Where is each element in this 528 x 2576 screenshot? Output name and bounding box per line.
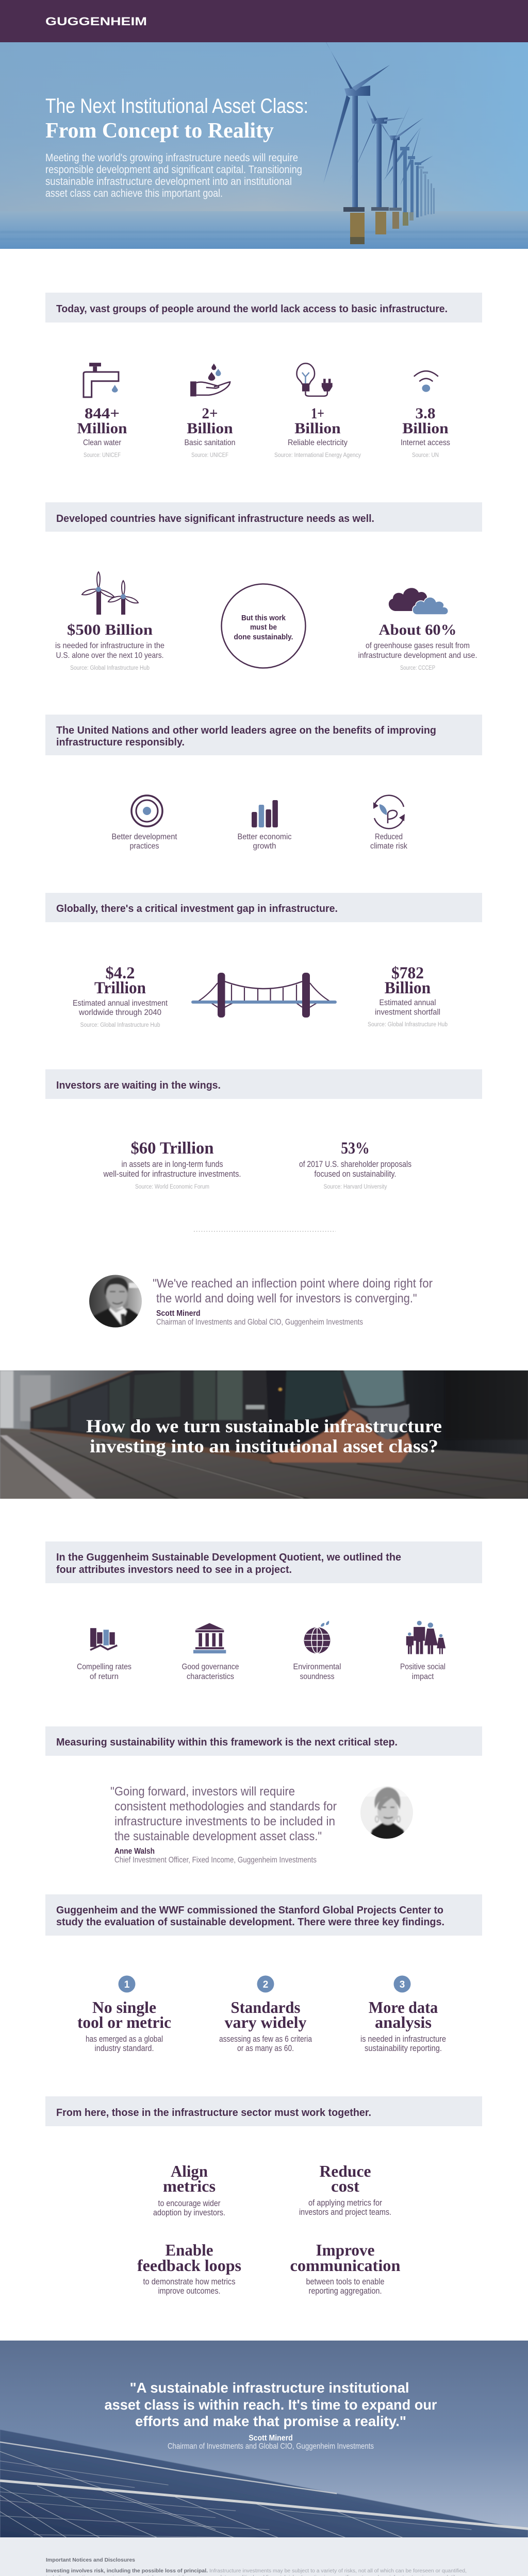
far turbines (419, 166, 435, 216)
stat: $4.2 trillion: Trillion (94, 979, 146, 997)
stat: basic sanitation: Basic sanitation (185, 438, 235, 447)
icon: returns chart (90, 1628, 117, 1650)
action: align metrics: Align (171, 2162, 208, 2180)
banner: work together: From here, those in the infrastructure sector must work together. (56, 2107, 371, 2119)
stat: basic sanitation: Billion (187, 420, 233, 437)
label: compelling rates of return (77, 1663, 131, 1681)
photo panel: tram with heading (0, 1370, 528, 1502)
finding 2 (219, 1975, 312, 2053)
portrait: Anne Walsh (360, 1786, 413, 1839)
finding 1: has emerged as a global (86, 2034, 163, 2044)
stat: reliable electricity: 1+ (311, 405, 324, 422)
label: better development practices (111, 833, 177, 851)
stat: internet access: Internet access (401, 438, 450, 447)
stat: $500 billion: is needed for infrastructure in the (55, 641, 164, 650)
stat: reliable electricity: Billion (294, 420, 341, 437)
disclosure paragraph 1: Investing involves risk, including the possible loss of principal. (46, 2568, 208, 2574)
icon: classical bank building (193, 1623, 226, 1653)
finding 2: assessing as few as 6 criteria (219, 2034, 312, 2044)
finding 3: analysis (375, 2013, 432, 2031)
finding 2: or as many as 60. (237, 2043, 294, 2053)
stat: internet access: Billion (402, 420, 449, 437)
closing quote: "A sustainable infrastructure institutional (130, 2380, 409, 2396)
label: reduced climate risk (370, 833, 407, 851)
banner: investors waiting (45, 1070, 482, 1099)
closing quote attribution: Chairman of Investments and Global CIO, Guggenheim Investments (168, 2442, 374, 2451)
banner: developed countries (45, 502, 482, 532)
action: enable feedback loops: feedback loops (137, 2256, 241, 2275)
stat: $782 billion: investment shortfall (375, 1008, 440, 1017)
icon: light bulb and plug (296, 363, 333, 396)
quote: Anne Walsh (110, 1785, 337, 1865)
stat: 53%: of 2017 U.S. shareholder proposals (299, 1159, 411, 1169)
stat: about 60%: Source: CCCEP (400, 665, 435, 671)
label: better development practices: practices (130, 842, 159, 851)
banner: United Nations: The United Nations and other world leaders agree on the benefits of improving (56, 725, 436, 736)
quote: Scott Minerd: Scott Minerd (156, 1309, 201, 1318)
stat: $500 billion: U.S. alone over the next 10 years. (56, 651, 164, 660)
label: better economic growth: growth (253, 842, 276, 851)
hero title (45, 95, 308, 143)
hero intro paragraph: sustainable infrastructure development into an institutional (45, 176, 292, 188)
stat: $782 billion: Estimated annual (380, 998, 436, 1007)
banner: measuring sustainability (45, 1726, 482, 1756)
finding 3: sustainability reporting. (365, 2043, 442, 2053)
quote: Anne Walsh: infrastructure investments to be included in (114, 1815, 335, 1828)
stat: $782 billion: Billion (385, 979, 431, 997)
stat: $500 billion: Source: Global Infrastructure Hub (70, 665, 150, 671)
turbine 2 (349, 99, 404, 210)
label: good governance characteristics: Good governance (182, 1663, 239, 1671)
banner: United Nations (45, 715, 482, 755)
quote: Scott Minerd: the world and doing well for investors is converging." (156, 1292, 417, 1306)
label: environmental soundness: soundness (300, 1672, 335, 1681)
action: reduce cost: investors and project teams. (299, 2207, 391, 2217)
action: enable feedback loops: Enable (165, 2241, 213, 2259)
header bar (0, 0, 528, 42)
banner: basic infrastructure: Today, vast groups of people around the world lack access to basic infrastructure. (56, 303, 448, 315)
label: positive social impact: impact (412, 1672, 434, 1681)
quote: Anne Walsh: Anne Walsh (114, 1847, 155, 1856)
stat: basic sanitation: Source: UNICEF (191, 452, 228, 459)
icon: target (131, 795, 162, 826)
quote: Scott Minerd: "We've reached an inflection point where doing right for (153, 1277, 433, 1291)
closing quote (104, 2380, 437, 2429)
action: align metrics: metrics (163, 2177, 216, 2195)
finding 2: Standards (231, 1998, 300, 2016)
tram panel heading: investing into an institutional asset class? (90, 1436, 438, 1456)
finding 3 (360, 1975, 446, 2053)
portrait: Scott Minerd (89, 1275, 142, 1327)
hero title: From Concept to Reality (45, 119, 274, 143)
label: good governance characteristics: characteristics (187, 1672, 234, 1681)
stat: $500 billion (55, 621, 164, 671)
hero intro paragraph: responsible development and significant capital. Transitioning (45, 164, 302, 176)
hero intro paragraph (45, 152, 302, 199)
label: better economic growth (237, 833, 292, 851)
action: reduce cost: of applying metrics for (308, 2198, 382, 2208)
stat: reliable electricity: Reliable electricity (288, 438, 348, 447)
stat: 53%: Source: Harvard University (324, 1184, 387, 1190)
label: better development practices: Better development (111, 833, 177, 841)
finding 1: tool or metric (77, 2013, 171, 2031)
callout circle: done sustainably: must be (250, 623, 277, 632)
callout circle: done sustainably: done sustainably. (234, 633, 293, 641)
stat: $60 trillion: Source: World Economic Forum (135, 1184, 209, 1190)
icon: hand with water drops (190, 364, 230, 396)
number badge 3 (394, 1975, 410, 1993)
stat: about 60%: of greenhouse gases result from (366, 641, 470, 650)
quote: Scott Minerd (153, 1277, 433, 1327)
turbine 3 (386, 106, 423, 210)
icon: family (406, 1621, 446, 1654)
number badge 1: 1 (124, 1979, 130, 1990)
photo panel: solar panels with closing quote (0, 2341, 528, 2538)
number badge 3: 3 (400, 1979, 405, 1990)
logo: Guggenheim wordmark: GUGGENHEIM (45, 15, 147, 28)
stat: $4.2 trillion: Estimated annual investment (73, 999, 168, 1008)
finding 3: is needed in infrastructure (360, 2034, 446, 2044)
stat: $782 billion: Source: Global Infrastructure Hub (368, 1022, 448, 1028)
hero title: The Next Institutional Asset Class: (45, 95, 308, 117)
action: improve communication: communication (290, 2256, 401, 2275)
stat: 53%: focused on sustainability. (315, 1169, 396, 1179)
callout circle: done sustainably: But this work (241, 614, 286, 622)
label: compelling rates of return: Compelling rates (77, 1663, 131, 1671)
stat: $500 billion: $500 Billion (67, 621, 153, 638)
icon: clouds (389, 588, 448, 615)
banner: investment gap (45, 893, 482, 922)
banner: measuring sustainability: Measuring sustainability within this framework is the next critical step. (56, 1737, 398, 1748)
stat: about 60%: infrastructure development and use. (358, 651, 477, 660)
stat: 53% (299, 1139, 411, 1190)
finding 1: industry standard. (95, 2043, 154, 2053)
banner: developed countries: Developed countries have significant infrastructure needs as well. (56, 513, 374, 524)
number badge 1 (119, 1975, 135, 1993)
closing quote attribution (168, 2434, 374, 2451)
banner: basic infrastructure (45, 293, 482, 323)
stat: clean water (77, 405, 127, 459)
stat: clean water: Clean water (83, 438, 121, 447)
stat: clean water: Source: UNICEF (84, 452, 121, 459)
label: positive social impact: Positive social (400, 1663, 446, 1671)
quote: Anne Walsh: "Going forward, investors will require (110, 1785, 295, 1799)
label: environmental soundness (293, 1663, 341, 1681)
hero intro paragraph: Meeting the world's growing infrastructure needs will require (45, 152, 298, 164)
action: align metrics (153, 2162, 225, 2217)
label: good governance characteristics (182, 1663, 239, 1681)
action: reduce cost: Reduce (320, 2162, 371, 2180)
tram panel heading: How do we turn sustainable infrastructure (86, 1416, 442, 1436)
label: reduced climate risk: climate risk (370, 842, 407, 851)
stat: $60 trillion: in assets are in long-term funds (122, 1159, 223, 1169)
number badge 2: 2 (263, 1979, 268, 1990)
quote: Anne Walsh: the sustainable development asset class." (114, 1829, 322, 1843)
number badge 2 (257, 1975, 274, 1993)
action: improve communication (290, 2241, 401, 2296)
action: align metrics: adoption by investors. (153, 2208, 225, 2217)
stat: $782 billion: $782 (391, 964, 424, 982)
icon: globe with leaves (304, 1621, 330, 1654)
icon: two wind turbines (82, 572, 138, 615)
action: align metrics: to encourage wider (158, 2198, 221, 2208)
quote: Anne Walsh: consistent methodologies and standards for (114, 1800, 337, 1814)
quote: Anne Walsh: Chief Investment Officer, Fixed Income, Guggenheim Investments (114, 1856, 317, 1865)
stat: internet access: 3.8 (416, 405, 435, 422)
stat: $4.2 trillion: worldwide through 2040 (78, 1008, 161, 1017)
stat: $60 trillion: $60 Trillion (131, 1139, 213, 1158)
stat: clean water: 844+ (85, 405, 120, 422)
disclosure paragraph 1 (46, 2568, 470, 2576)
banner: work together (45, 2096, 482, 2126)
banner: sustainable development quotient: four attributes investors need to see in a project. (56, 1564, 292, 1575)
finding 1 (77, 1975, 171, 2053)
stat: $4.2 trillion: Source: Global Infrastructure Hub (80, 1022, 160, 1028)
action: improve communication: between tools to enable (306, 2277, 385, 2286)
icon: water tap (84, 363, 119, 397)
quote: Scott Minerd: Chairman of Investments and Global CIO, Guggenheim Investments (156, 1318, 363, 1327)
disclosures heading: Important Notices and Disclosures (46, 2557, 135, 2563)
banner: Stanford study: study the evaluation of sustainable development. There were three key findings. (56, 1917, 444, 1928)
banner: investment gap: Globally, there's a critical investment gap in infrastructure. (56, 903, 338, 914)
footer panel: disclosures (0, 2537, 528, 2576)
disclosure paragraph 1: Infrastructure investments may be subject to a variety of risks, not all of which can be foreseen or quantified, (209, 2568, 467, 2574)
icon: wifi signal (414, 371, 438, 392)
icon: plant in cycle arrows (373, 795, 405, 828)
icon: suspension bridge (191, 973, 337, 1018)
stat: about 60% (358, 621, 477, 671)
closing quote: asset class is within reach. It's time to expand our (104, 2397, 437, 2413)
stat: basic sanitation: 2+ (202, 405, 218, 422)
stat: reliable electricity (274, 405, 361, 459)
hero panel: offshore wind turbines (0, 42, 528, 249)
banner: United Nations: infrastructure responsibly. (56, 737, 185, 748)
stat: reliable electricity: Source: International Energy Agency (274, 452, 361, 459)
action: enable feedback loops: improve outcomes. (158, 2286, 221, 2296)
label: compelling rates of return: of return (90, 1672, 119, 1681)
stat: $60 trillion (103, 1139, 241, 1190)
hero intro paragraph: asset class can achieve this important goal. (45, 188, 223, 199)
finding 1: No single (92, 1998, 156, 2016)
turbine 1 (323, 42, 390, 211)
stat: $4.2 trillion (73, 964, 168, 1028)
label: better economic growth: Better economic (237, 833, 292, 841)
action: improve communication: reporting aggregation. (308, 2286, 382, 2296)
banner: Stanford study (45, 1894, 482, 1936)
closing quote attribution: Scott Minerd (249, 2434, 293, 2443)
stat: $4.2 trillion: $4.2 (105, 964, 135, 982)
action: enable feedback loops: to demonstrate how metrics (143, 2277, 235, 2286)
action: improve communication: Improve (316, 2241, 374, 2259)
icon: growth bar chart (252, 800, 278, 827)
stat: clean water: Million (77, 420, 127, 437)
stat: internet access: Source: UN (412, 452, 439, 459)
closing quote: efforts and make that promise a reality." (135, 2413, 406, 2429)
stat: 53%: 53% (341, 1139, 370, 1158)
stat: internet access (401, 405, 450, 459)
action: enable feedback loops (137, 2241, 241, 2296)
banner: investors waiting: Investors are waiting in the wings. (56, 1080, 221, 1091)
tram panel heading (86, 1416, 442, 1456)
finding 2: vary widely (225, 2013, 306, 2031)
banner: sustainable development quotient: In the Guggenheim Sustainable Development Quotient, we outlined the (56, 1552, 401, 1563)
finding 3: More data (369, 1998, 438, 2016)
action: reduce cost (299, 2162, 391, 2217)
label: reduced climate risk: Reduced (375, 833, 403, 841)
label: positive social impact (400, 1663, 446, 1681)
banner: sustainable development quotient (45, 1541, 482, 1583)
banner: Stanford study: Guggenheim and the WWF commissioned the Stanford Global Projects Center to (56, 1905, 443, 1916)
label: environmental soundness: Environmental (293, 1663, 341, 1671)
stat: $60 trillion: well-suited for infrastructure investments. (103, 1169, 241, 1179)
action: reduce cost: cost (331, 2177, 359, 2195)
stat: about 60%: About 60% (378, 621, 457, 638)
callout circle: done sustainably (222, 584, 305, 668)
stat: basic sanitation (185, 405, 235, 459)
stat: $782 billion (368, 964, 448, 1028)
